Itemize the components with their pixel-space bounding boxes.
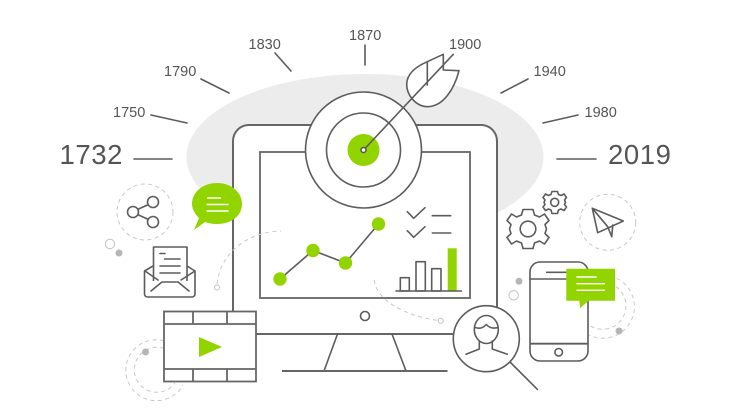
play triangle [199, 337, 222, 357]
icon: paper plane [580, 194, 636, 250]
target with arrow [306, 54, 459, 208]
dashed connector left [214, 231, 281, 290]
year 1790: 1790 [164, 64, 196, 80]
icon: video film strip [164, 312, 256, 382]
monitor body [233, 125, 497, 334]
icon: smartphone [530, 262, 588, 361]
dashed connector right [374, 280, 443, 323]
bar chart [396, 248, 462, 291]
magnifier lens [453, 306, 519, 372]
decorative dots left [105, 239, 122, 256]
arrow shaft [364, 54, 453, 150]
icon: magnifier with person [453, 306, 537, 389]
magnifier handle [510, 362, 537, 389]
dashed rings bottom left [126, 340, 183, 401]
target rings [306, 92, 422, 208]
monitor stand [324, 334, 406, 371]
icon: green chat square [566, 269, 615, 308]
background ellipse [186, 74, 544, 240]
icon: large gear [507, 210, 549, 248]
line chart [273, 217, 385, 286]
year 1870: 1870 [349, 28, 381, 44]
decorative dots right [509, 278, 522, 300]
icon: envelope [144, 247, 195, 297]
year 1900: 1900 [449, 37, 481, 53]
icon: share [117, 184, 173, 240]
dashed rings right [589, 278, 634, 338]
arrow feather [407, 54, 459, 107]
timeline tick marks [134, 45, 596, 159]
icon: small gear [543, 192, 566, 214]
timeline labels [60, 28, 672, 170]
year 2019: 2019 [608, 139, 672, 170]
icon: green speech bubble [192, 183, 242, 230]
monitor [233, 125, 497, 371]
year 1750: 1750 [113, 105, 145, 121]
year 1940: 1940 [534, 64, 566, 80]
monitor base [282, 370, 448, 372]
monitor screen [260, 152, 470, 298]
checklist [407, 208, 451, 237]
person [474, 316, 498, 344]
power button [360, 312, 370, 320]
year 1980: 1980 [584, 105, 617, 121]
target bullseye [348, 134, 380, 166]
year 1830: 1830 [248, 37, 281, 53]
year 1732: 1732 [60, 139, 123, 170]
